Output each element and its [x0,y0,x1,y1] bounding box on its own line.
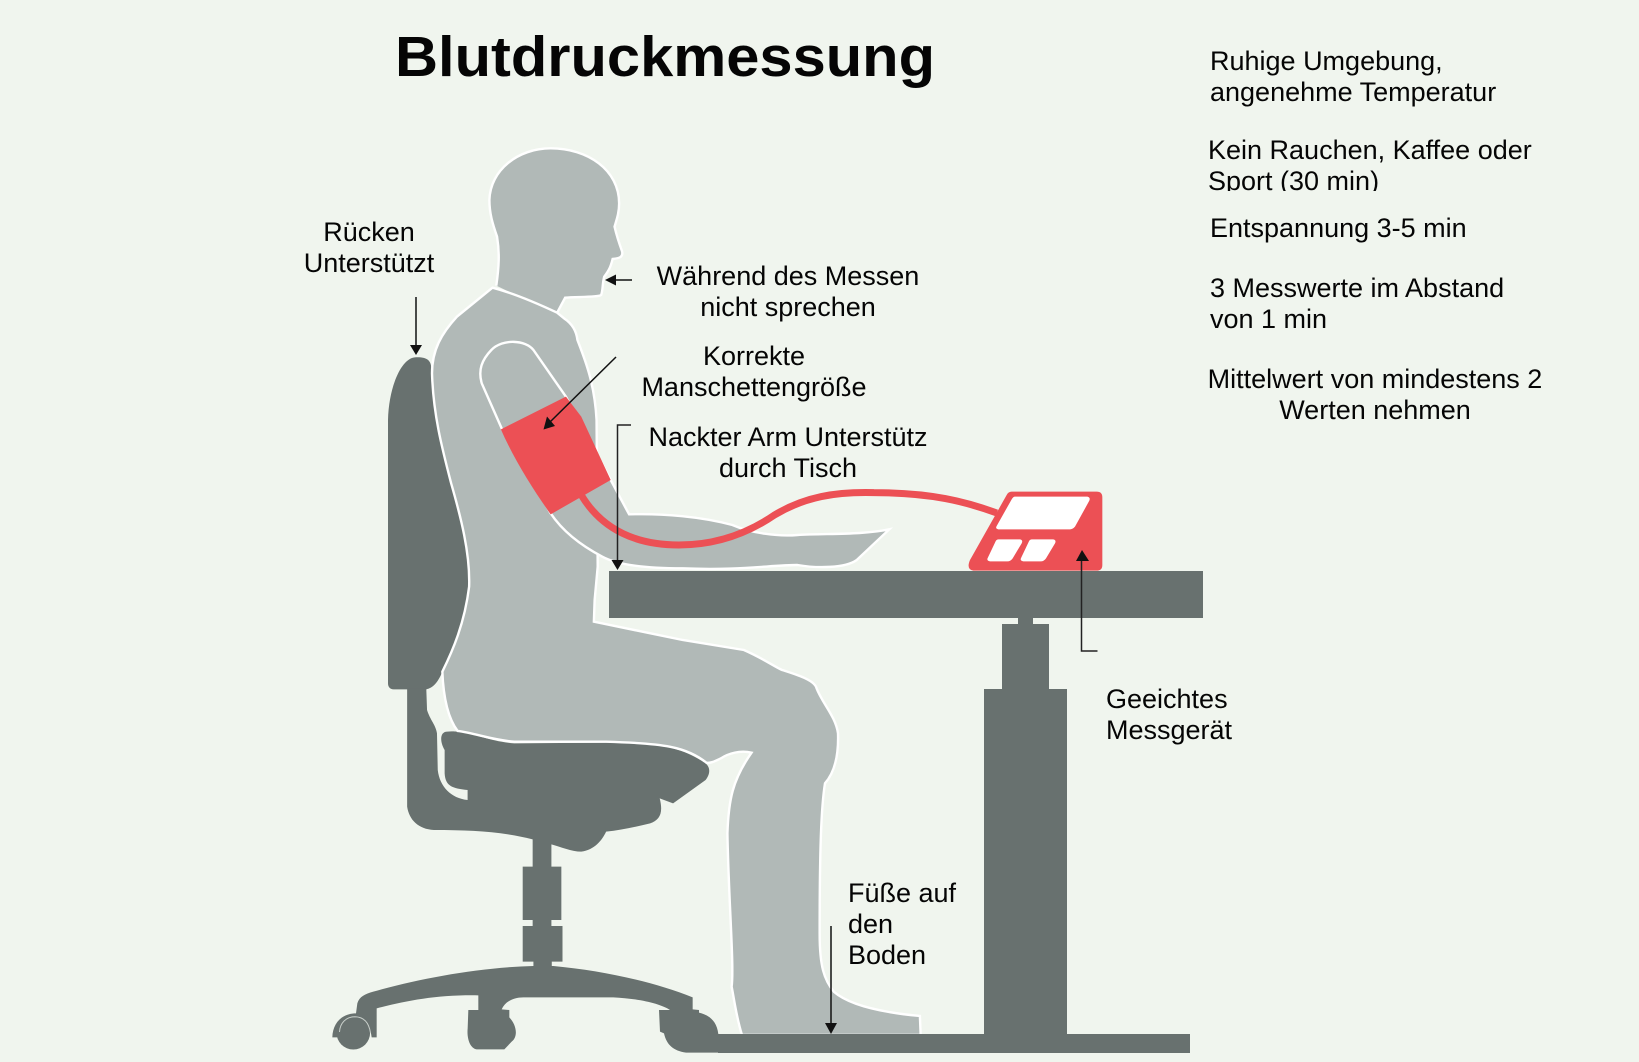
label: feet on floor: Füße auf [848,878,956,908]
tip: environment: Ruhige Umgebung, [1210,46,1443,76]
label: back supported: Rücken [323,217,415,247]
tip: no smoking: Kein Rauchen, Kaffee oder [1208,135,1532,165]
body silhouette [432,148,921,1035]
label: calibrated device: Messgerät [1106,715,1233,745]
label: bare arm: durch Tisch [719,453,857,483]
tip: three readings: 3 Messwerte im Abstand [1210,273,1504,303]
tip: relaxation: Entspannung 3-5 min [1210,213,1467,243]
tip: mean value: Werten nehmen [1279,395,1471,425]
arm [480,342,889,569]
arrow: feet [825,926,837,1034]
table and floor [609,571,1203,1053]
chair seat and column [407,688,709,967]
table stem [1018,618,1033,624]
tip: three readings: von 1 min [1210,304,1327,334]
label: no talking: Während des Messen [657,261,919,291]
arrow: mouth [605,274,632,286]
cuff tube [581,493,997,545]
blood pressure cuff [501,397,611,514]
monitor screen [996,497,1090,529]
tip: mean value: Mittelwert von mindestens 2 [1208,364,1542,394]
label: feet on floor: den [848,909,893,939]
monitor button left [987,539,1022,561]
label: cuff size: Manschettengröße [641,372,867,402]
table top [609,571,1203,618]
label: cuff size: Korrekte [703,341,805,371]
title: Blutdruckmessung [395,25,935,89]
label: bare arm: Nackter Arm Unterstütz [648,422,928,452]
label: feet on floor: Boden [848,940,926,970]
tip: environment: angenehme Temperatur [1210,77,1496,107]
arrow: monitor [1076,550,1098,651]
tip: no smoking [1209,140,1532,191]
arrow: back support [410,297,422,355]
label: back supported: Unterstützt [304,248,435,278]
table column [984,689,1067,1039]
seated person [432,148,997,1035]
floor [718,1034,1190,1053]
chair backrest [388,357,469,689]
tip: no smoking: Sport (30 min) [1208,166,1379,196]
arrow: arm on table [612,425,631,570]
office chair [332,357,718,1053]
left caster wheel [336,1016,370,1050]
label: calibrated device: Geeichtes [1106,684,1228,714]
monitor body [969,492,1102,571]
arrow: cuff [544,357,616,430]
label: no talking: nicht sprechen [700,292,876,322]
monitor button right [1021,539,1056,561]
chair base with casters [332,966,718,1053]
blood pressure monitor [969,492,1102,571]
